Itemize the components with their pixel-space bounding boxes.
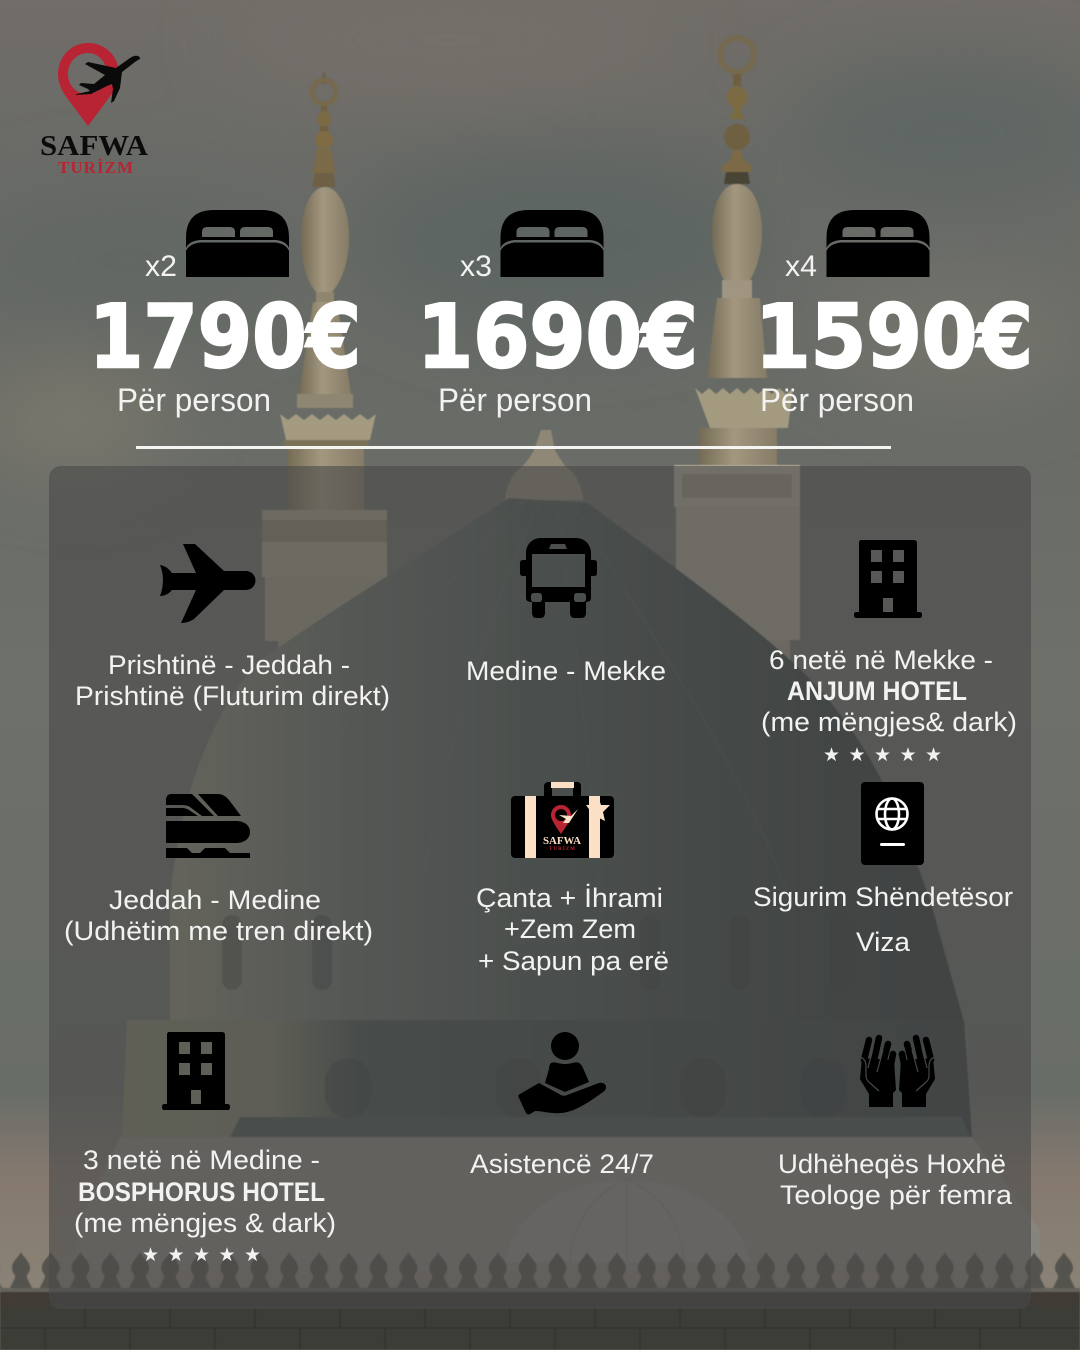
main dome [170, 498, 964, 1022]
dome drum [122, 1020, 972, 1137]
item: 24/7 assistance: Asistencë 24/7 [470, 1149, 654, 1179]
icon: black plane [75, 56, 140, 103]
item: bag, ihram, zem zem, soap: + Sapun pa erë [478, 946, 669, 976]
price option: double room: Për person [117, 382, 271, 418]
price option: triple room [417, 210, 698, 418]
price option: triple room: Për person [438, 382, 592, 418]
icon: passport [861, 782, 924, 865]
icon: praying hands [860, 1038, 935, 1107]
price option: quad room [755, 210, 1033, 418]
right minaret [674, 38, 800, 720]
item: Mecca hotel: (me mëngjes& dark) [761, 707, 1017, 737]
price option: triple room: 1690€ [417, 286, 698, 388]
item: train: Jeddah - Medine [109, 885, 321, 915]
item: bag, ihram, zem zem, soap: Çanta + İhrami [476, 882, 663, 913]
star rating: ★★★★★ [142, 1244, 261, 1266]
icon: bus [520, 538, 597, 618]
item: female theologian guide: Udhëheqës Hoxhë [778, 1149, 1006, 1179]
item: female theologian guide [778, 1038, 1013, 1210]
price option: double room [89, 210, 361, 418]
item: health insurance and visa: Viza [856, 927, 911, 957]
item: bus transfer [466, 538, 666, 686]
wall [0, 1252, 1080, 1292]
icon: bed [186, 210, 289, 277]
logo: Safwa Turizm: TURİZM [58, 158, 133, 177]
main dome cap [505, 430, 583, 500]
star rating: ★★★★★ [823, 744, 942, 766]
item: Mecca hotel [761, 540, 1017, 766]
item: 24/7 assistance [470, 1032, 654, 1179]
item: health insurance and visa: Sigurim Shëndetësor [753, 882, 1013, 912]
item: train [64, 794, 373, 946]
item: flight: Prishtinë - Jeddah - [108, 650, 350, 680]
price option: quad room: x4 [785, 250, 817, 283]
item: health insurance and visa [753, 782, 1013, 957]
translucent content panel [49, 466, 1031, 1309]
logo: Safwa Turizm: SAFWA [40, 130, 148, 162]
item: bag, ihram, zem zem, soap [476, 782, 669, 976]
right hand [899, 1038, 935, 1107]
icon: bed [500, 210, 604, 277]
item: Medina hotel [74, 1032, 336, 1266]
item: bag, ihram, zem zem, soap: +Zem Zem [504, 914, 636, 944]
icon: branded suitcase: TURİZM [549, 846, 575, 852]
icon: hotel building [162, 1032, 230, 1110]
icon: person in caring hand [518, 1032, 606, 1114]
left minaret [262, 72, 387, 721]
price option: triple room: x3 [460, 250, 492, 283]
item: flight [75, 544, 390, 711]
icon: hotel building [854, 540, 922, 618]
logo: Safwa Turizm [40, 43, 148, 177]
icon: high-speed train [166, 794, 250, 858]
item: Mecca hotel: ANJUM HOTEL [787, 676, 967, 706]
left hand [860, 1038, 896, 1107]
price option: double room: 1790€ [89, 286, 361, 388]
item: bus transfer: Medine - Mekke [466, 656, 666, 686]
icon: branded suitcase: SAFWA [543, 836, 582, 847]
item: Medina hotel: (me mëngjes & dark) [74, 1208, 336, 1238]
item: Mecca hotel: 6 netë në Mekke - [769, 645, 993, 675]
item: train: (Udhëtim me tren direkt) [64, 916, 373, 946]
price option: quad room: 1590€ [755, 286, 1033, 388]
item: female theologian guide: Teologe për femra [780, 1180, 1013, 1210]
white base and small dome [76, 1137, 1040, 1270]
price option: double room: x2 [145, 250, 177, 283]
icon: red location pin [58, 43, 119, 126]
icon: bed [826, 210, 930, 277]
price option: quad room: Për person [760, 382, 914, 418]
icon: airplane [160, 544, 256, 623]
item: Medina hotel: BOSPHORUS HOTEL [78, 1177, 325, 1207]
item: Medina hotel: 3 netë në Medine - [83, 1145, 320, 1175]
icon: branded suitcase [511, 782, 614, 858]
item: flight: Prishtinë (Fluturim direkt) [75, 681, 390, 711]
